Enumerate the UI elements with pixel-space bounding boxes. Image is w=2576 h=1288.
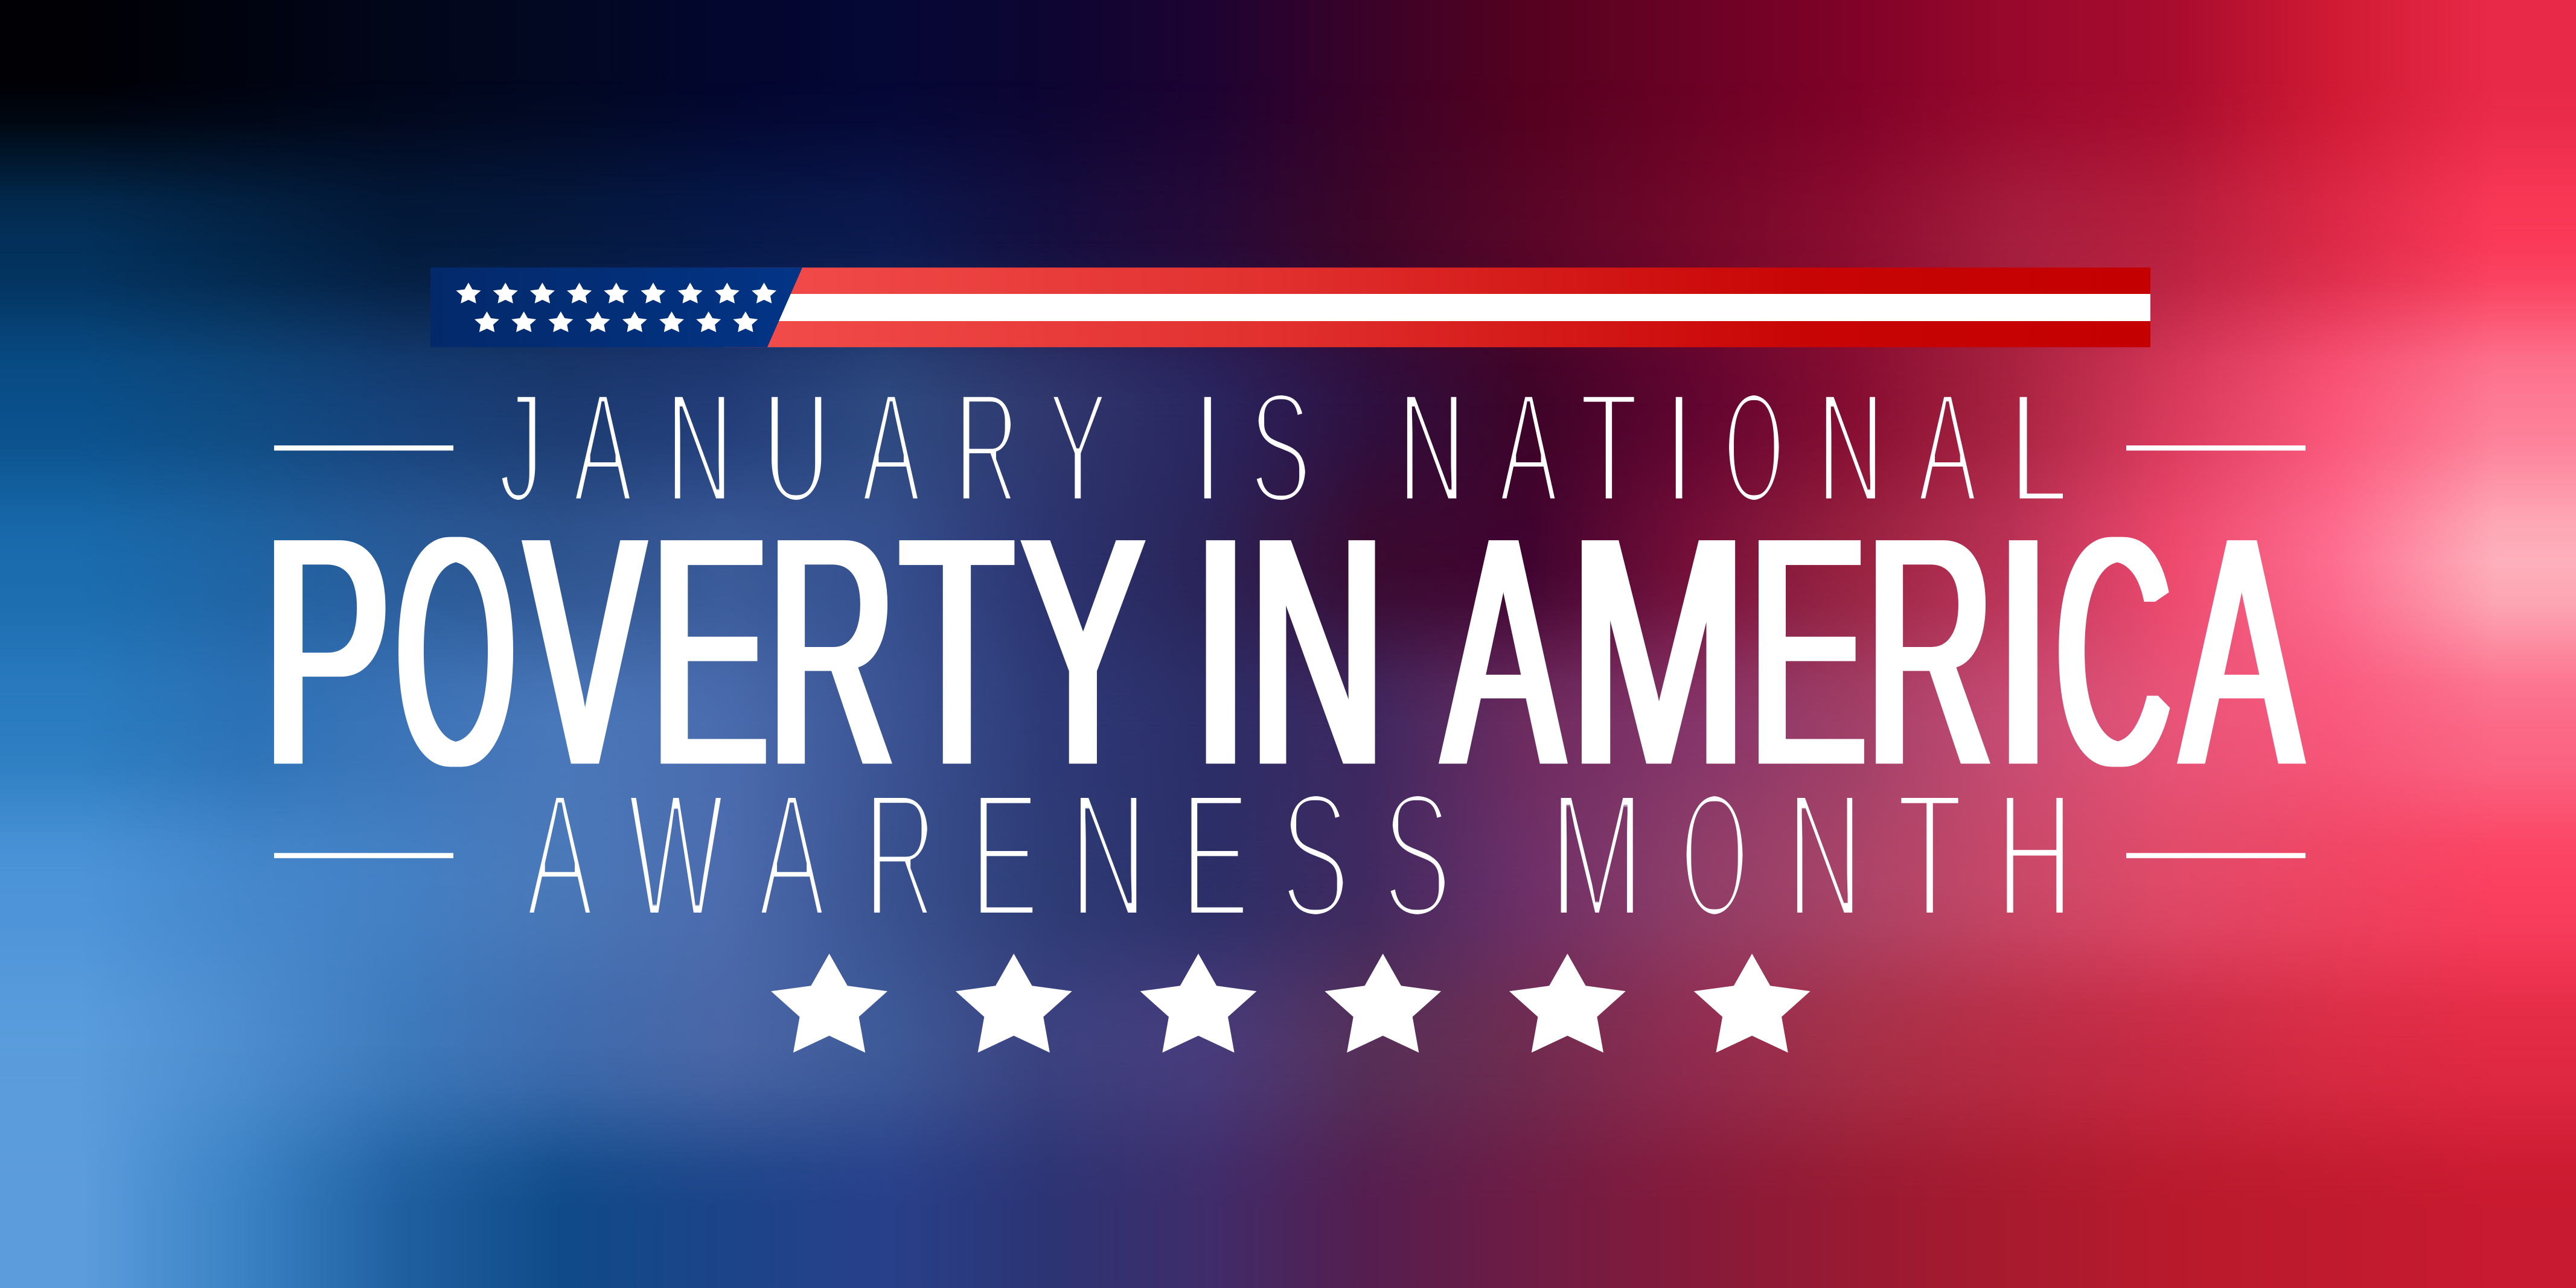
heading line: Awareness Month: H <box>1996 755 2073 955</box>
heading line: January is National: Y <box>1048 360 1107 536</box>
heading line: January is National: L <box>2010 360 2068 536</box>
white stripe <box>724 294 2150 321</box>
rule: bottom right <box>2126 853 2306 858</box>
heading line: Awareness Month: N <box>1070 755 1147 955</box>
heading line: Awareness Month: A <box>758 755 826 955</box>
heading line: January is National: N <box>1398 360 1465 536</box>
heading line: January is National: A <box>1918 360 1978 536</box>
heading line: January is National: T <box>1580 360 1637 536</box>
title: Poverty in America: I <box>1194 470 1248 833</box>
heading line: January is National: I <box>1666 360 1692 536</box>
heading line: January is National: N <box>1817 360 1884 536</box>
heading line: Awareness Month: E <box>971 755 1038 955</box>
heading line: Awareness Month: R <box>864 755 936 955</box>
red stripes <box>724 267 2150 347</box>
title: Poverty in America: C <box>2056 470 2170 833</box>
title: Poverty in America: T <box>901 470 1013 833</box>
heading line: January is National: J <box>499 360 543 536</box>
heading line: January is National <box>499 360 2068 536</box>
heading line: January is National: I <box>1194 360 1221 536</box>
heading line: Awareness Month: T <box>1897 755 1963 955</box>
title: Poverty in America: I <box>1997 470 2050 833</box>
heading line: Awareness Month: M <box>1550 755 1644 955</box>
heading line: January is National: A <box>1499 360 1558 536</box>
heading line: Awareness Month: A <box>526 755 595 955</box>
heading line: Awareness Month: S <box>1382 755 1451 955</box>
title: Poverty in America: E <box>652 470 768 833</box>
title: Poverty in America: P <box>264 470 390 833</box>
title: Poverty in America: M <box>1570 470 1747 833</box>
rule: top left <box>274 445 453 450</box>
title: Poverty in America: R <box>769 470 895 833</box>
heading line: January is National: A <box>861 360 921 536</box>
flag stars <box>456 282 776 332</box>
heading line: Awareness Month: O <box>1681 755 1748 955</box>
row of six stars <box>771 954 1811 1053</box>
heading line: January is National: R <box>955 360 1018 536</box>
title: Poverty in America <box>264 470 2302 833</box>
heading line: January is National: N <box>666 360 733 536</box>
heading line: Awareness Month: E <box>1181 755 1249 955</box>
heading line: Awareness Month: N <box>1787 755 1862 955</box>
heading line: January is National: O <box>1724 360 1784 536</box>
heading line: January is National: U <box>763 360 829 536</box>
heading line: January is National: S <box>1250 360 1311 536</box>
title: Poverty in America: Y <box>1022 470 1142 833</box>
rule: top right <box>2126 445 2306 450</box>
heading line: January is National: A <box>573 360 633 536</box>
title: Poverty in America: R <box>1867 470 1993 833</box>
rule: bottom left <box>274 853 453 858</box>
heading line: Awareness Month: S <box>1280 755 1349 955</box>
blue star field <box>430 267 802 347</box>
heading line: Awareness Month: W <box>627 755 725 955</box>
title: Poverty in America: A <box>2182 470 2302 833</box>
title: Poverty in America: N <box>1250 470 1385 833</box>
title: Poverty in America: V <box>526 470 645 833</box>
flag banner <box>430 267 2150 347</box>
title: Poverty in America: E <box>1750 470 1866 833</box>
title: Poverty in America: A <box>1443 470 1564 833</box>
title: Poverty in America: O <box>397 470 515 833</box>
heading line: Awareness Month <box>526 755 2073 955</box>
